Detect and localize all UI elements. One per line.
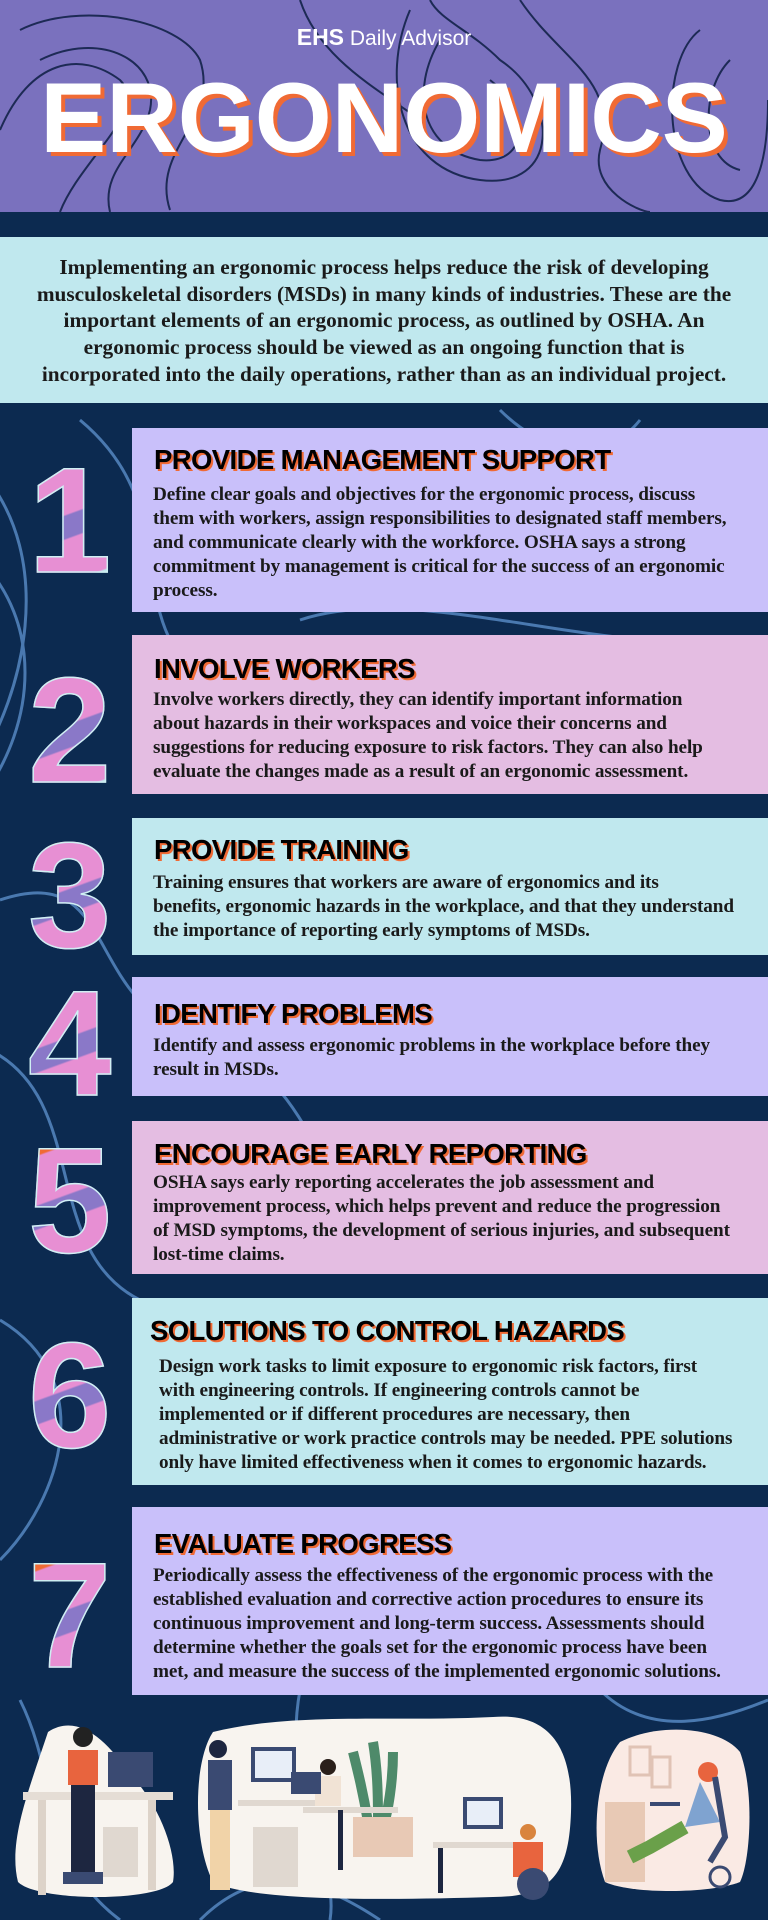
panel 3: training: Training ensures that workers are aware of ergonomics and its	[153, 872, 659, 893]
panel 7: evaluate progress: EVALUATE PROGRESS	[154, 1528, 451, 1559]
number 7: 7	[28, 1531, 111, 1699]
panel 1: management support: them with workers, assign responsibilities to designated staff members,	[153, 508, 726, 529]
panel 5: early reporting	[132, 1121, 768, 1274]
panel 6: control hazards: only have limited effectiveness when it comes to ergonomic hazards.	[159, 1452, 707, 1473]
panel 5: early reporting: ENCOURAGE EARLY REPORTING	[154, 1138, 587, 1169]
panel 1: management support	[132, 428, 768, 612]
panel 4: identify problems: result in MSDs.	[153, 1059, 279, 1080]
panel 6: control hazards: Design work tasks to limit exposure to ergonomic risk factors, first	[159, 1356, 697, 1377]
illustration: open office	[198, 1716, 572, 1900]
panel 1: management support: Define clear goals and objectives for the ergonomic process, discuss	[153, 484, 695, 505]
title: ERGONOMICS: ERGONOMICS	[40, 62, 728, 173]
panel 5: early reporting: OSHA says early reporting accelerates the job assessment and	[153, 1172, 654, 1193]
panel 5: early reporting: of MSD symptoms, the development of serious injuries, and subsequent	[153, 1220, 730, 1241]
panel 1: management support: commitment by management is critical for the success of an ergonomic	[153, 556, 725, 577]
panel 6: control hazards: administrative or work practice controls may be needed. PPE solutions	[159, 1428, 732, 1449]
intro text block: incorporated into the daily operations, rather than as an individual project.	[42, 362, 726, 386]
number 3: 3	[28, 811, 111, 979]
panel 7: evaluate progress: Periodically assess the effectiveness of the ergonomic process with the	[153, 1565, 713, 1586]
panel 4: identify problems	[132, 977, 768, 1096]
panel 3: training: PROVIDE TRAINING	[154, 834, 409, 865]
panel 1: management support: PROVIDE MANAGEMENT SUPPORT	[154, 444, 611, 475]
panel 4: identify problems: Identify and assess ergonomic problems in the workplace before they	[153, 1035, 710, 1056]
panel 3: training	[132, 818, 768, 955]
panel 3: training: the importance of reporting early symptoms of MSDs.	[153, 920, 590, 941]
illustration: standing desk worker	[15, 1726, 174, 1897]
panel 2: involve workers: suggestions for reducing exposure to risk factors. They can also help	[153, 737, 703, 758]
panel 7: evaluate progress: established evaluation and corrective action procedures to ensure its	[153, 1589, 703, 1610]
intro text block: ergonomic process should be viewed as an ongoing function that is	[84, 335, 684, 359]
number 4: 4	[28, 959, 111, 1127]
panel 5: early reporting: lost-time claims.	[153, 1244, 285, 1265]
intro text block: Implementing an ergonomic process helps reduce the risk of developing	[59, 255, 709, 279]
panel 2: involve workers: Involve workers directly, they can identify important information	[153, 689, 682, 710]
number 2: 2	[28, 646, 111, 814]
panel 2: involve workers: evaluate the changes made as a result of an ergonomic assessment.	[153, 761, 688, 782]
panel 2: involve workers: INVOLVE WORKERS	[154, 653, 415, 684]
panel 6: control hazards	[132, 1298, 768, 1485]
panel 7: evaluate progress	[132, 1507, 768, 1695]
panel 6: control hazards: with engineering controls. If engineering controls cannot be	[159, 1380, 639, 1401]
panel 1: management support: process.	[153, 580, 217, 601]
illustration: reclining chair worker	[596, 1730, 750, 1891]
number 1: 1	[28, 436, 111, 604]
panel 6: control hazards: SOLUTIONS TO CONTROL HAZARDS	[150, 1315, 624, 1346]
intro text block	[0, 237, 768, 403]
panel 1: management support: and communicate clearly with the workforce. OSHA says a strong	[153, 532, 685, 553]
panel 7: evaluate progress: continuous improvement and long-term success. Assessments should	[153, 1613, 704, 1634]
number 6: 6	[28, 1311, 111, 1479]
panel 7: evaluate progress: determine whether the goals set for the ergonomic process have been	[153, 1637, 707, 1658]
panel 7: evaluate progress: met, and measure the success of the implemented ergonomic solutions.	[153, 1661, 721, 1682]
brand: EHS Daily Advisor: EHS Daily Advisor	[297, 24, 471, 50]
intro text block: musculoskeletal disorders (MSDs) in many kinds of industries. These are the	[37, 282, 731, 306]
panel 5: early reporting: improvement process, which helps prevent and reduce the progression	[153, 1196, 720, 1217]
panel 4: identify problems: IDENTIFY PROBLEMS	[154, 998, 432, 1029]
panel 6: control hazards: implemented or if different procedures are necessary, then	[159, 1404, 630, 1425]
panel 3: training: benefits, ergonomic hazards in the workplace, and that they understand	[153, 896, 734, 917]
number 5: 5	[28, 1116, 111, 1284]
intro text block: important elements of an ergonomic process, as outlined by OSHA. An	[64, 308, 704, 332]
header banner	[0, 0, 768, 212]
panel 2: involve workers: about hazards in their workspaces and voice their concerns and	[153, 713, 667, 734]
panel 2: involve workers	[132, 635, 768, 794]
